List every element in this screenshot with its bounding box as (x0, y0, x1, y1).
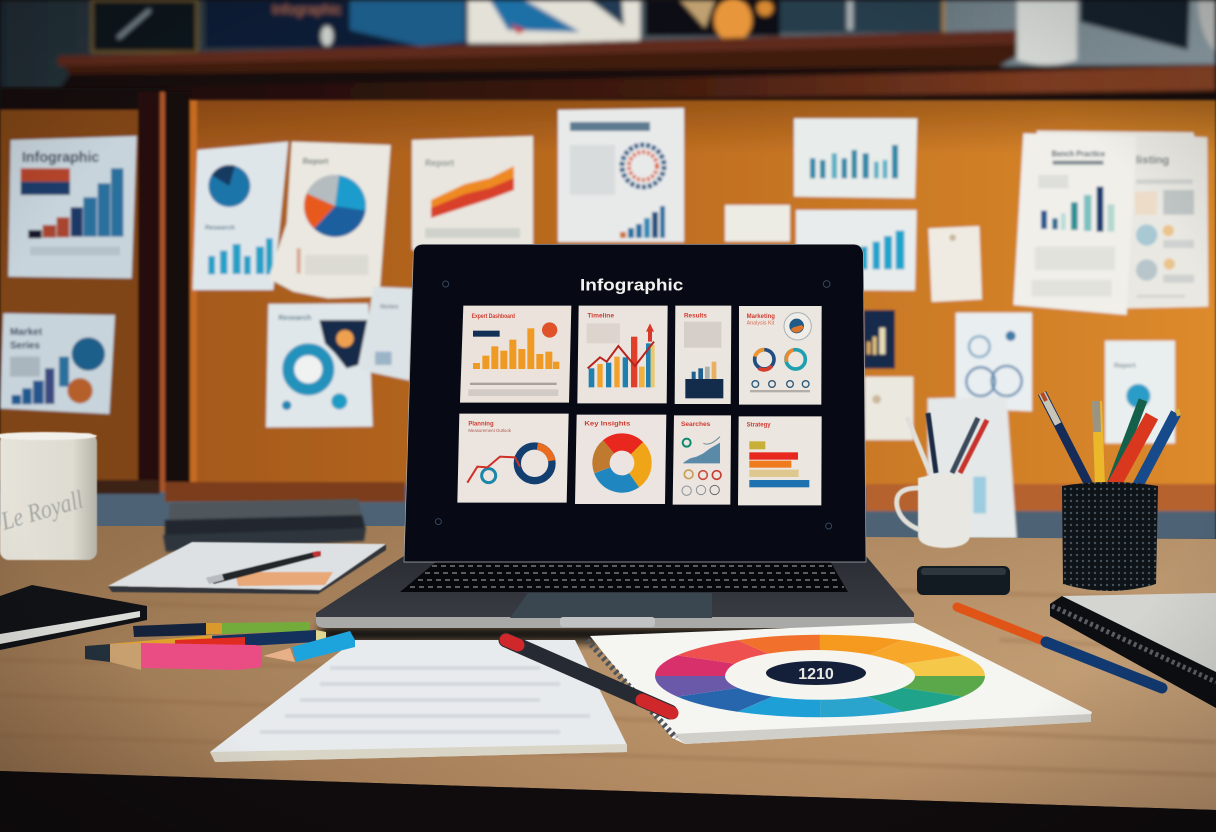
paper: navy mini chart (863, 310, 895, 369)
paper: lower left chart with spheres (0, 313, 115, 414)
card: rings and small icons: Analysis Kit (747, 320, 775, 326)
corkboard (0, 88, 1216, 540)
pens in small mug (907, 413, 987, 473)
marker red (1113, 416, 1152, 487)
card: rings and small icons (739, 306, 822, 405)
framed print 1 (92, 0, 197, 52)
colour wheel (642, 632, 998, 720)
paper: lower left chart with spheres: Market (10, 327, 43, 338)
white mug left with script: Le Royall (0, 485, 86, 536)
card: text and dark table (675, 306, 731, 404)
paper with pen on desk (108, 542, 386, 594)
desk surface (0, 526, 1216, 832)
paper: blue pie and bars (193, 142, 288, 290)
paper: note with blue half-circle: Report (1114, 362, 1136, 369)
card: colored donut: Key Insights (584, 422, 631, 428)
card: line and donut: Measurement Outlook (468, 428, 512, 433)
mesh holder (1062, 482, 1158, 591)
laptop lid and screen (404, 244, 866, 562)
notepad (210, 640, 627, 762)
card: bars and rising line (577, 306, 668, 403)
laptop shadow (320, 626, 910, 642)
small white mug with pens (897, 413, 987, 548)
left zone papers (0, 136, 413, 427)
pencil green (1110, 400, 1143, 487)
framed print 2 (205, 0, 467, 48)
paper: staircase bar chart: Infographic (22, 150, 99, 166)
laptop (316, 244, 914, 642)
wheel centre (726, 650, 906, 698)
shelf (0, 30, 1216, 106)
lid (404, 244, 866, 562)
framed print 2: Infographic (272, 1, 341, 17)
paper: lower left chart with spheres: Series (10, 340, 40, 351)
card: line and donut (457, 414, 569, 503)
black notebook (0, 585, 147, 650)
pen blue (1137, 412, 1180, 487)
card: mixed small charts (673, 415, 731, 505)
marker pink (85, 643, 262, 670)
card: orange bars (460, 306, 571, 403)
paper: small tilted note: Notes (380, 303, 399, 310)
paper: report sheet front (1013, 133, 1137, 315)
paper: radial dial and bars (558, 108, 684, 242)
marker cyan (263, 631, 355, 662)
white vase on shelf (1017, 0, 1077, 65)
paper: small tilted note (360, 287, 413, 381)
card: horizontal bars (738, 416, 822, 505)
white mug left with script (0, 432, 97, 560)
cork surface (0, 88, 1216, 540)
card: orange bars: Expert Dashboard (472, 313, 515, 320)
paper: small bar chart top (794, 118, 917, 198)
pencil yellow (1096, 401, 1100, 487)
card: mixed small charts: Searches (681, 422, 711, 428)
card: line and donut: Planning (468, 421, 494, 427)
laptop base (316, 556, 914, 628)
paper: report sheet behind (1037, 131, 1208, 308)
paper: orange area chart (412, 136, 533, 250)
paper: blue pie and bars: Research (205, 224, 235, 231)
small mug body (897, 474, 970, 548)
card: colored donut (575, 415, 666, 504)
back wall with framed prints and shelf (0, 0, 1216, 106)
marker green (133, 622, 310, 637)
black device (917, 566, 1010, 595)
marker red (175, 637, 245, 648)
card: horizontal bars: Strategy (747, 423, 771, 429)
framed print 4 (645, 0, 945, 42)
pencil navy (1042, 393, 1090, 487)
marker navy (212, 630, 326, 648)
paper: rings (956, 313, 1032, 411)
paper: donut with navy shape: Research (278, 313, 312, 322)
paper: blank note (725, 205, 790, 242)
paper: blue bars mid (796, 210, 917, 291)
paper: report sheet front: Bench Practice (1052, 150, 1106, 159)
markers (85, 622, 355, 670)
spiral notebook right (1050, 593, 1216, 708)
framed print 3 (468, 0, 640, 43)
paper: large pie chart (268, 142, 391, 298)
paper: large pie chart: Report (303, 157, 329, 166)
card: text and dark table: Results (684, 312, 707, 319)
pencils in mesh holder (1042, 393, 1180, 591)
paper: behind mug (928, 397, 1017, 538)
red and blue pen right (957, 607, 1162, 688)
paper: donut with navy shape (266, 303, 373, 427)
card: rings and small icons: Marketing (747, 314, 775, 320)
paper: report sheet behind: listing (1136, 154, 1169, 166)
tilted poster (1080, 0, 1216, 52)
black and red pen on notepad (506, 640, 672, 713)
paper: note with blue half-circle (1105, 341, 1175, 443)
stacked books (163, 499, 366, 552)
paper: staircase bar chart (8, 136, 137, 278)
screen title: Infographic (580, 276, 683, 295)
right zone papers (725, 118, 1208, 538)
corner dots (435, 281, 832, 529)
paper: orange area chart: Report (425, 158, 454, 168)
pencil yellow (85, 635, 212, 652)
card: bars and rising line: Timeline (587, 312, 614, 319)
spiral notebook with colour wheel (587, 623, 1092, 744)
paper: blank note lower left (865, 377, 913, 440)
wheel centre: 1210 (798, 666, 834, 683)
paper: blank note with pin (928, 226, 982, 302)
